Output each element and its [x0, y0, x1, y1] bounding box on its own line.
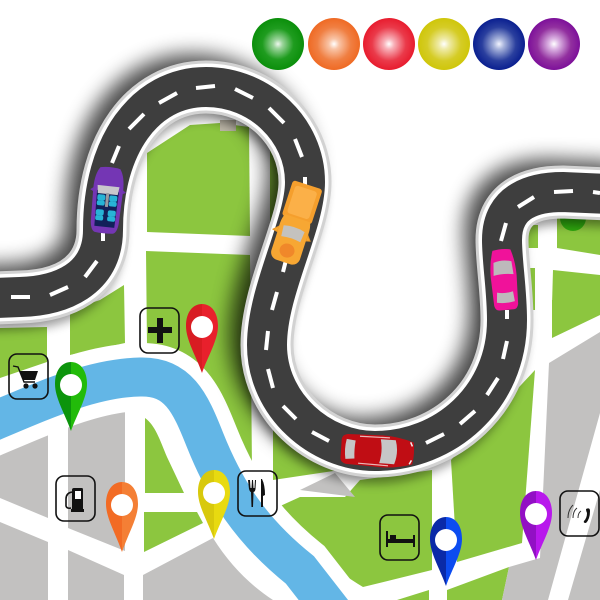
- winding road: [0, 86, 600, 451]
- grey city blocks: [0, 332, 600, 600]
- ball: purple: [528, 18, 580, 70]
- icon: medical cross: [140, 308, 179, 353]
- icon: shopping cart: [9, 354, 48, 399]
- car: purple convertible: [86, 165, 128, 235]
- pin: yellow: [198, 470, 230, 539]
- pin: purple: [520, 491, 552, 560]
- car: orange pickup truck: [264, 179, 326, 268]
- car: pink sedan: [488, 248, 520, 311]
- ball: green: [252, 18, 304, 70]
- river with white banks: [0, 377, 335, 600]
- road shadows: [0, 78, 600, 462]
- pin: green: [55, 362, 87, 431]
- icon: telephone: [560, 491, 599, 536]
- icon: fuel pump: [56, 476, 95, 521]
- pin: red: [186, 304, 218, 373]
- icon: fork and knife: [238, 471, 277, 516]
- ball: blue: [473, 18, 525, 70]
- green city blocks: [0, 123, 600, 600]
- road centre dashes: [11, 86, 600, 443]
- pin: blue: [430, 517, 462, 586]
- ball: red: [363, 18, 415, 70]
- dark green patch: [560, 205, 586, 231]
- grey patch: [220, 120, 236, 131]
- pin: orange: [106, 482, 138, 552]
- ball: yellow: [418, 18, 470, 70]
- map background: [0, 120, 600, 600]
- ball: orange: [308, 18, 360, 70]
- icon: hotel bed: [380, 515, 419, 560]
- car: red sedan: [340, 433, 415, 470]
- colour balls: [252, 18, 580, 70]
